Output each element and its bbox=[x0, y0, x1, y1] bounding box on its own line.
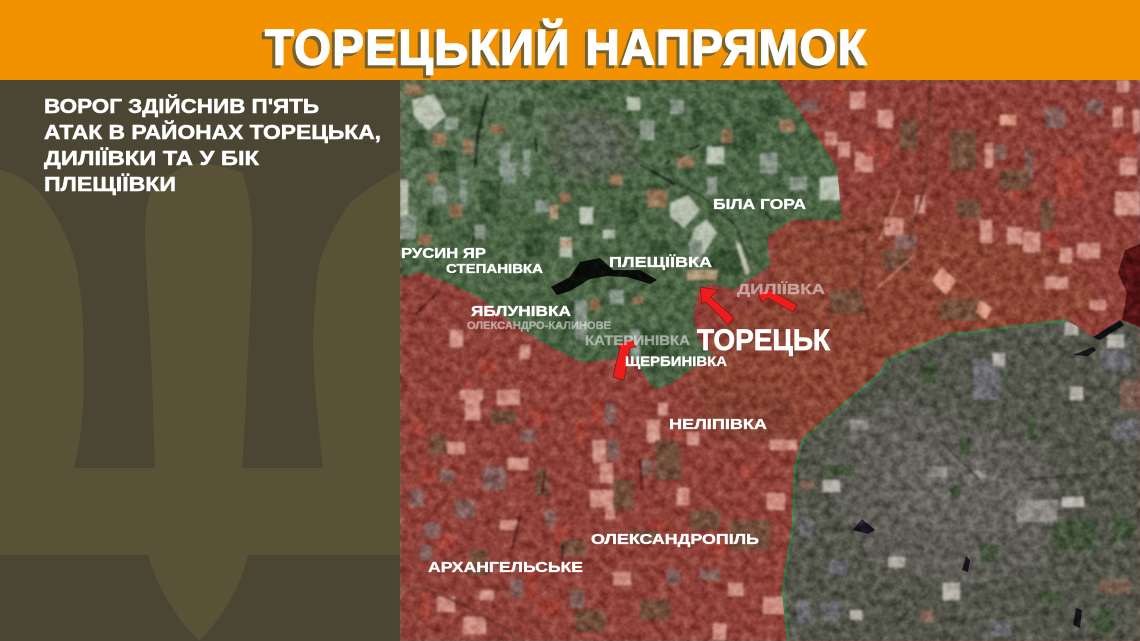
label: Stepanivka: СТЕПАНІВКА bbox=[446, 261, 544, 276]
map: green front line bbox=[783, 320, 1067, 641]
label: Nelipivka: НЕЛІПІВКА bbox=[669, 416, 767, 433]
body text: АТАК В РАЙОНАХ ТОРЕЦЬКА, bbox=[44, 120, 381, 144]
label: Bila Hora: БІЛА ГОРА bbox=[713, 196, 806, 213]
label: Diliivka: ДИЛІЇВКА bbox=[737, 281, 825, 298]
map: satellite texture overlay bbox=[400, 80, 1140, 641]
body text: ПЛЕЩІЇВКИ bbox=[44, 173, 176, 196]
label: Oleksandropil: ОЛЕКСАНДРОПІЛЬ bbox=[591, 531, 759, 548]
body text: ДИЛІЇВКИ ТА У БІК bbox=[44, 147, 260, 170]
label: Shcherbynivka: ЩЕРБИНІВКА bbox=[625, 353, 727, 369]
trident emblem bbox=[0, 163, 400, 641]
map: occupied territory (red) bbox=[400, 80, 1140, 641]
label: Pleshchiivka: ПЛЕЩІЇВКА bbox=[609, 254, 712, 271]
title banner bbox=[0, 0, 1140, 80]
label: Rusyn Yar: РУСИН ЯР bbox=[401, 245, 486, 262]
title: ТОРЕЦЬКИЙ НАПРЯМОК bbox=[265, 18, 868, 76]
map: lake in the east bbox=[1118, 244, 1140, 328]
arrow: attack towards Katerynivka bbox=[613, 340, 636, 380]
map bbox=[400, 80, 1140, 641]
label: Yablunivka: ЯБЛУНІВКА bbox=[471, 303, 571, 320]
map labels bbox=[401, 196, 831, 576]
map: small ponds bbox=[853, 519, 1082, 628]
label: Arkhanhelske: АРХАНГЕЛЬСЬКЕ bbox=[428, 559, 583, 576]
body text bbox=[44, 94, 381, 196]
map: Ukrainian-held area north-west (green) bbox=[400, 80, 860, 400]
label: Toretsk: ТОРЕЦЬК bbox=[697, 324, 831, 357]
arrow: attack from Diliivka bbox=[758, 290, 797, 312]
arrow: attack towards Pleshchiivka bbox=[700, 287, 734, 325]
map: government-held area south-east (grey) bbox=[780, 310, 1140, 641]
left text panel bbox=[0, 80, 400, 641]
map: reservoir bbox=[551, 258, 657, 295]
label: Oleksandro-Kalynove: ОЛЕКСАНДРО-КАЛИНОВЕ bbox=[467, 320, 611, 332]
body text: ВОРОГ ЗДІЙСНИВ П'ЯТЬ bbox=[44, 94, 319, 118]
label: Katerynivka: КАТЕРИНІВКА bbox=[585, 332, 690, 348]
